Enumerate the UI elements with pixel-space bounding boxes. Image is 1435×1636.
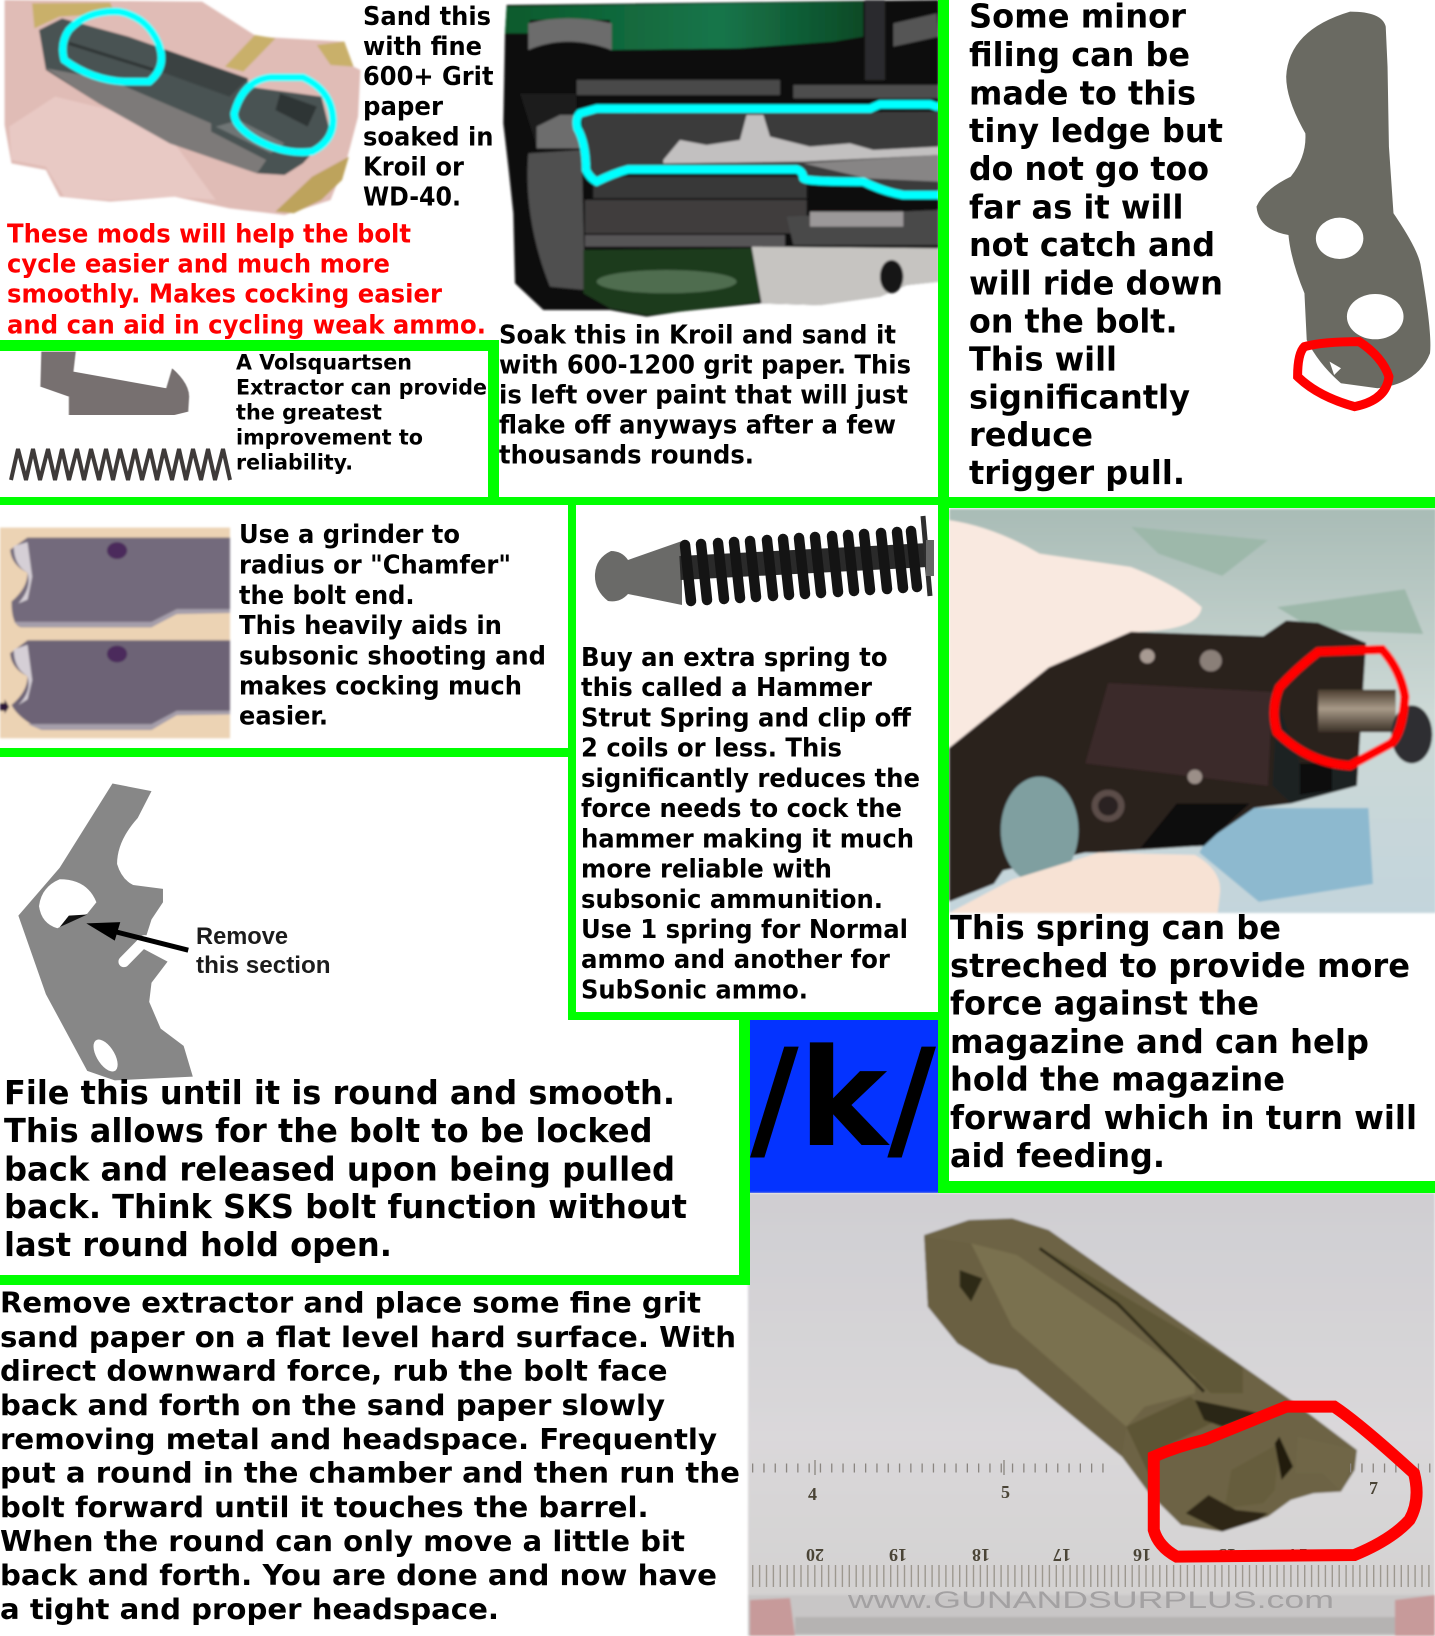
caption: sand this: WD-40. [363, 183, 461, 213]
caption: minor filing [969, 0, 1223, 492]
ruler numbers: 7 [1369, 1478, 1378, 1498]
caption: bolt face headspace procedure: bolt forward until it touches the barrel. [0, 1491, 649, 1524]
caption: sand this: paper [363, 92, 443, 122]
caption: grinder: This heavily aids in [239, 611, 502, 641]
caption: sand this: 600+ Grit [363, 62, 494, 92]
ruler numbers: 16 [1133, 1545, 1151, 1565]
caption: minor filing: tiny ledge but [969, 112, 1223, 150]
caption: hammer strut spring: Use 1 spring for Normal [581, 915, 908, 945]
caption: grinder: radius or "Chamfer" [239, 551, 511, 581]
caption: minor filing: filing can be [969, 36, 1190, 74]
caption: sand this: Kroil or [363, 153, 464, 183]
caption: extractor: improvement to [236, 425, 423, 450]
ruler numbers: 4 [808, 1484, 817, 1504]
ruler numbers: 15 [1218, 1545, 1236, 1565]
caption: hammer strut spring: hammer making it much [581, 824, 914, 854]
caption: spring stretched: aid feeding. [950, 1137, 1165, 1175]
caption: extractor: A Volsquartsen [236, 350, 412, 375]
caption: sand this: soaked in [363, 123, 494, 153]
photo: chamfered bolt ends [0, 528, 230, 738]
caption: spring stretched: This spring can be [950, 909, 1281, 947]
arrow [86, 922, 188, 950]
photo: trigger group with bolt stop spring [949, 509, 1435, 913]
caption: minor filing: reduce [969, 416, 1093, 454]
caption: hammer strut spring: ammo and another for [581, 945, 890, 975]
caption: bolt face headspace procedure: direct downward force, rub the bolt face [0, 1354, 668, 1388]
caption: spring stretched: magazine and can help [950, 1023, 1369, 1061]
caption: soak in Kroil: Soak this in Kroil and sand it [499, 321, 896, 351]
caption: minor filing: This will [969, 340, 1117, 378]
caption: minor filing: do not go too [969, 150, 1209, 188]
caption: extractor: reliability. [236, 450, 353, 475]
spring coils [685, 531, 917, 601]
caption: bolt face headspace procedure: back and forth. You are done and now have [0, 1559, 717, 1592]
caption: file until round [4, 1074, 687, 1264]
caption: hammer strut spring: SubSonic ammo. [581, 976, 808, 1006]
ruler numbers: 20 [806, 1545, 824, 1565]
callout: remove this section: this section [196, 952, 331, 979]
ruler numbers [806, 1478, 1378, 1565]
ruler numbers: 19 [889, 1545, 907, 1565]
red note: benefits of the mods: and can aid in cycling weak ammo. [7, 310, 486, 340]
photo: receiver rail with paint [503, 0, 939, 317]
ruler numbers: 5 [1001, 1482, 1010, 1502]
caption: bolt face headspace procedure [0, 1287, 740, 1626]
caption: grinder: easier. [239, 702, 328, 732]
caption: hammer strut spring: subsonic ammunition. [581, 885, 883, 915]
caption: file until round: File this until it is round and smooth. [4, 1074, 675, 1112]
red circle: tiny ledge [1298, 342, 1389, 407]
photo: sear part with red circle [1257, 12, 1430, 407]
caption: spring stretched: forward which in turn will [950, 1099, 1417, 1137]
logo: /k/ on blue: /k/ [750, 1020, 937, 1177]
caption: sand this: with fine [363, 32, 482, 62]
caption: minor filing: trigger pull. [969, 454, 1185, 492]
caption: hammer strut spring [581, 643, 920, 1006]
photo: hammer strut and spring [595, 516, 934, 605]
caption: bolt face headspace procedure: put a round in the chamber and then run the [0, 1457, 740, 1490]
bolt body [924, 1218, 1357, 1532]
caption: bolt face headspace procedure: a tight and proper headspace. [0, 1593, 499, 1626]
caption: spring stretched: streched to provide more [950, 947, 1410, 985]
red note: benefits of the mods: cycle easier and much more [7, 250, 390, 280]
red note: benefits of the mods: These mods will help the bolt [7, 220, 411, 250]
caption: bolt face headspace procedure: Remove extractor and place some fine grit [0, 1287, 701, 1320]
caption: soak in Kroil [499, 321, 911, 471]
hammer strut [595, 541, 682, 605]
photo: bolt held in hand [5, 0, 360, 215]
caption: soak in Kroil: flake off anyways after a few [499, 411, 896, 441]
ruler numbers: 14 [1290, 1545, 1308, 1565]
caption: grinder: subsonic shooting and [239, 642, 546, 672]
caption: file until round: This allows for the bolt to be locked [4, 1112, 652, 1150]
caption: grinder: Use a grinder to [239, 520, 460, 550]
caption: hammer strut spring: 2 coils or less. This [581, 734, 842, 764]
caption: minor filing: will ride down [969, 264, 1223, 302]
caption: grinder: the bolt end. [239, 581, 415, 611]
green panel dividers [0, 0, 1435, 1285]
ruler numbers: 18 [972, 1545, 990, 1565]
caption: minor filing: far as it will [969, 188, 1184, 226]
caption: grinder: makes cocking much [239, 672, 522, 702]
red note: benefits of the mods: smoothly. Makes cocking easier [7, 280, 442, 310]
caption: hammer strut spring: more reliable with [581, 855, 832, 885]
cyan circle: bolt face [234, 77, 333, 152]
caption: file until round: back. Think SKS bolt function without [4, 1188, 687, 1226]
red circle: bolt face [1154, 1407, 1417, 1557]
ruler numbers: 17 [1053, 1545, 1071, 1565]
caption: soak in Kroil: thousands rounds. [499, 441, 754, 471]
caption: minor filing: not catch and [969, 226, 1215, 264]
caption: spring stretched [950, 909, 1417, 1175]
caption: extractor [236, 350, 487, 475]
photo: Volquartsen extractor [40, 352, 189, 415]
callout: remove this section: Remove [196, 923, 288, 950]
caption: hammer strut spring: this called a Hammer [581, 673, 872, 703]
photo: bolt on ruler [748, 1193, 1435, 1636]
callout: remove this section [196, 923, 331, 979]
caption: extractor: Extractor can provide [236, 375, 487, 400]
red circle: bolt stop spring [1274, 650, 1405, 766]
caption: hammer strut spring: Strut Spring and clip off [581, 704, 912, 734]
ruler ticks [752, 1460, 1435, 1576]
caption: grinder [239, 520, 546, 732]
caption: sand this [363, 2, 494, 213]
caption: minor filing: made to this [969, 74, 1196, 112]
caption: bolt face headspace procedure: removing metal and headspace. Frequently [0, 1423, 717, 1456]
caption: file until round: last round hold open. [4, 1226, 392, 1264]
icon: extractor spring [11, 449, 230, 480]
bolt body [39, 18, 331, 175]
caption: bolt face headspace procedure: sand paper on a flat level hard surface. With [0, 1321, 736, 1354]
caption: minor filing: on the bolt. [969, 303, 1178, 341]
cyan circle: rear of bolt [63, 12, 161, 82]
caption: hammer strut spring: Buy an extra spring to [581, 643, 888, 673]
caption: soak in Kroil: with 600-1200 grit paper. This [499, 351, 911, 381]
caption: extractor: the greatest [236, 400, 382, 425]
caption: hammer strut spring: significantly reduces the [581, 764, 920, 794]
caption: file until round: back and released upon being pulled [4, 1150, 675, 1188]
caption: spring stretched: force against the [950, 985, 1259, 1023]
watermark: www.GUNANDSURPLUS.com [847, 1587, 1334, 1614]
caption: soak in Kroil: is left over paint that will just [499, 381, 908, 411]
caption: bolt face headspace procedure: back and forth on the sand paper slowly [0, 1389, 665, 1422]
red note: benefits of the mods [7, 220, 486, 340]
caption: sand this: Sand this [363, 2, 491, 32]
caption: bolt face headspace procedure: When the round can only move a little bit [0, 1525, 685, 1558]
diagram: disconnector with remove callout [18, 783, 331, 1080]
caption: hammer strut spring: force needs to cock the [581, 794, 902, 824]
caption: spring stretched: hold the magazine [950, 1061, 1285, 1099]
cyan outline: area to sand [577, 104, 939, 195]
caption: minor filing: significantly [969, 378, 1190, 416]
